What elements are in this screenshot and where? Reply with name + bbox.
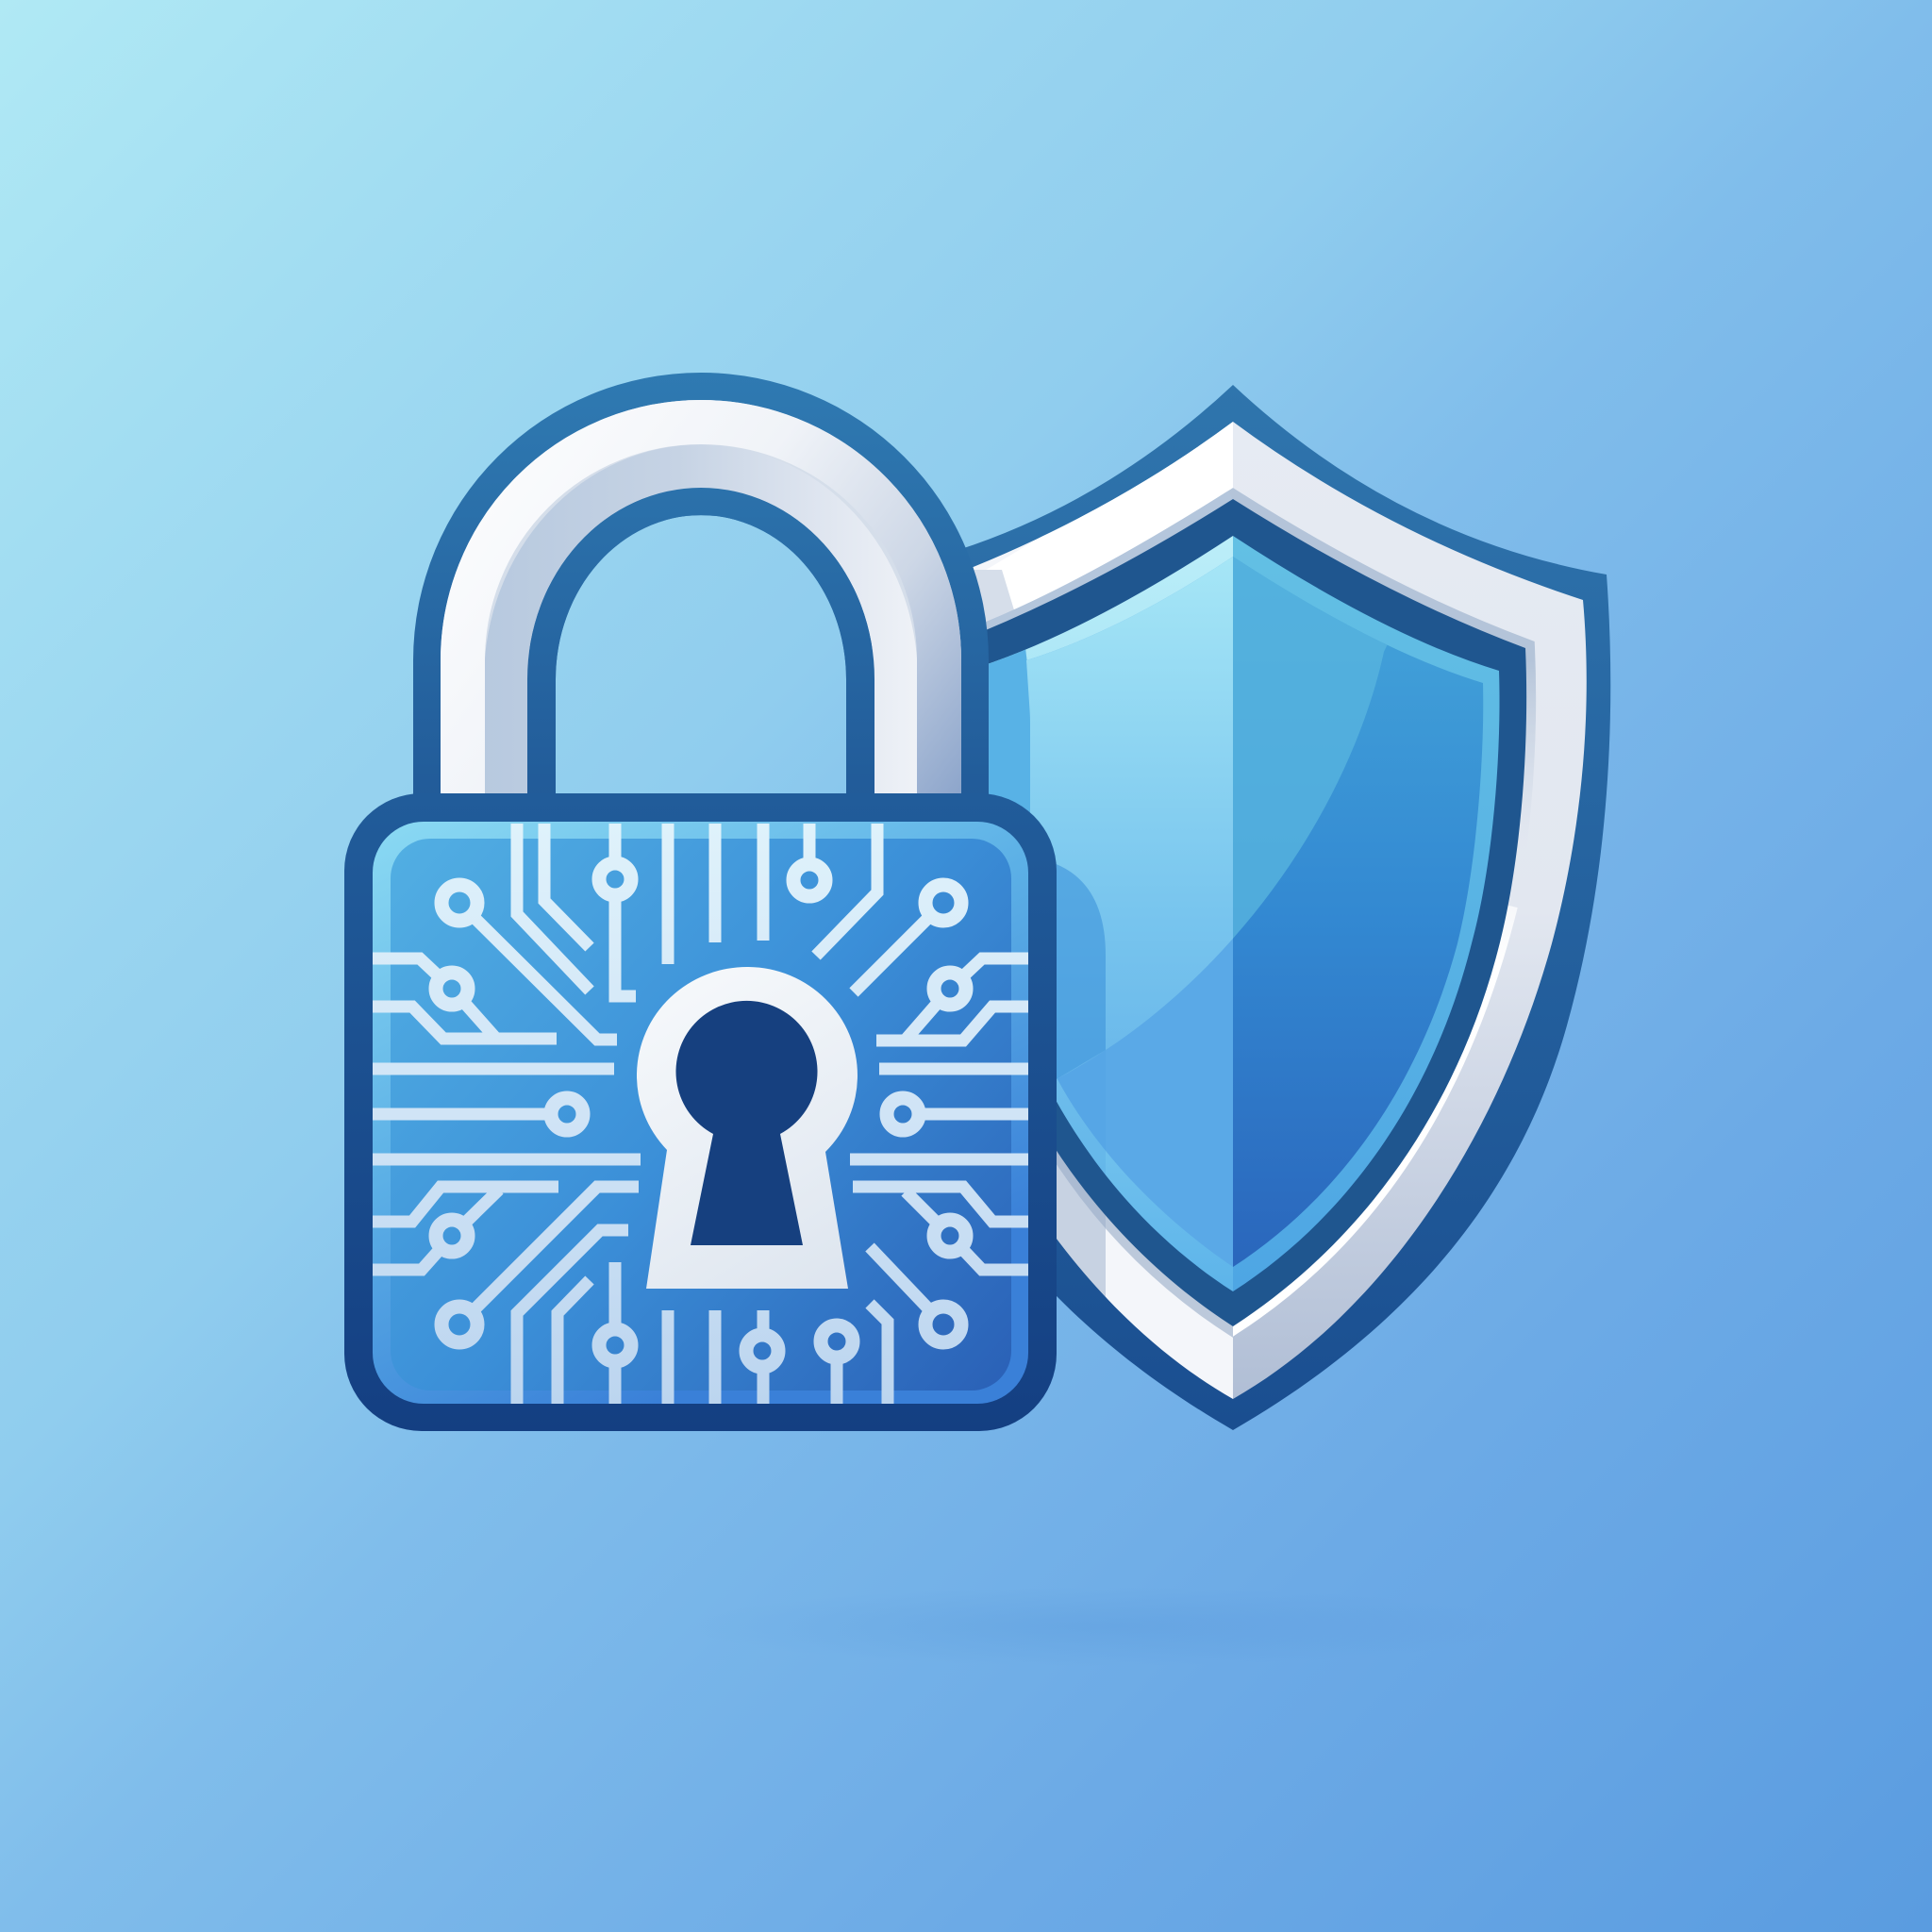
shackle outer metal band [462, 423, 940, 793]
lock body panel [391, 839, 1011, 1391]
shield inner dark ring [940, 499, 1526, 1326]
right traces [850, 958, 1028, 1270]
left highlight [1026, 557, 1233, 1077]
keyhole white surround [637, 967, 858, 1289]
shackle metal base [485, 444, 917, 793]
shield [966, 385, 1611, 1430]
left strip [989, 649, 1030, 813]
left facet [1026, 557, 1233, 1267]
shackle inner metal band [484, 444, 918, 793]
circuit traces [373, 824, 1028, 1404]
shackle dark outline [413, 373, 989, 811]
shield face [989, 536, 1500, 1291]
faint shadow below the highlight [1057, 1079, 1106, 1174]
shackle [413, 373, 989, 811]
lock cast shadow [1057, 864, 1106, 1079]
top traces [459, 824, 943, 1040]
shield white band [974, 422, 1587, 1399]
circuit nodes [436, 863, 966, 1367]
shield outer dark border [966, 385, 1611, 1430]
keyhole opening [675, 1001, 818, 1245]
padlock [344, 373, 1057, 1431]
shackle inner dark outline [527, 488, 874, 793]
face rims [989, 536, 1233, 1291]
bottom traces [517, 1230, 943, 1404]
left traces [373, 958, 641, 1324]
right facet [1233, 557, 1483, 1267]
lock body border [344, 793, 1057, 1431]
right highlight [1233, 557, 1387, 938]
lock body rim [373, 822, 1028, 1404]
ground shadow [689, 1587, 1519, 1666]
